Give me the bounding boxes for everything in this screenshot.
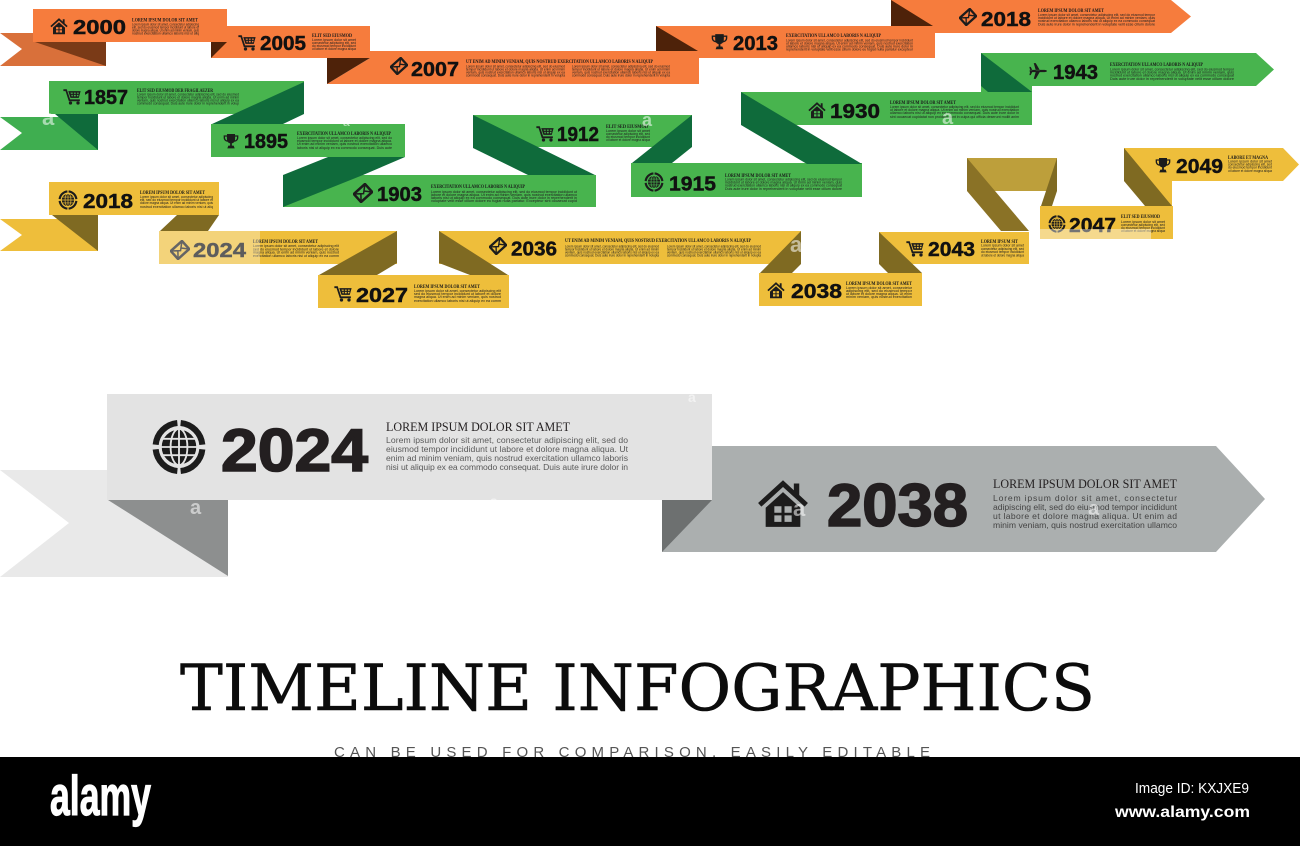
ribbon 1943 arrow [981,53,1274,92]
footer bar [0,757,1300,846]
year: 2024 [221,417,369,484]
body text: Lorem ipsum dolor sit amet, consectetur adipiscing elit, sed do eiusmod tempor incididunt ut [431,190,577,194]
band [879,232,1029,264]
watermark letters: a [942,107,954,129]
band [662,446,1265,552]
fold [741,92,862,164]
body text: Lorem ipsum dolor sit amet [1228,160,1272,164]
body text: Lorem ipsum dolor sit amet, consectetur adipiscing elit, sed do eiusmod tempor incididunt [890,105,1019,109]
heading: ELIT SED EIUSMOD [606,124,648,130]
body text: Lorem ipsum dolor sit amet, consectetur adipiscing elit, sed do eiusmod [137,92,239,96]
fold right [1041,158,1057,206]
body text: Lorem ipsum dolor sit amet, consectetur adipiscing elit [414,289,501,293]
fold [35,42,106,66]
body text: reprehenderit in voluptate velit esse cillum dolore eu fugiat nulla pariatur excepteur [786,48,914,52]
body text: consectetur adipiscing elit, sed [981,247,1024,251]
heading: LOREM IPSUM SIT [981,239,1018,245]
fold [211,42,227,58]
fold [981,53,1032,92]
green timeline [0,53,1274,207]
band [981,53,1274,92]
fold [55,114,98,150]
band [49,182,219,215]
watermark letters: a [793,496,806,521]
heading: EXERCITATION ULLAMCO LABORIS N ALIQUIP [1110,62,1204,68]
body text: eiusmod tempor incididunt ut labore et dolore magna aliqua. [297,139,392,143]
body text: magna aliqua. Ut enim ad minim veniam, quis nostrud [414,295,501,299]
body text: nisi ut aliquip ex ea commodo consequat. Duis aute irure dolor in [386,462,628,472]
tail [0,219,98,251]
watermark letters: a [343,115,350,129]
icon: house [50,18,68,34]
body text: commodo consequat. Duis aute irure dolor in reprehenderit in volupta [572,74,670,78]
band [656,26,935,58]
body text: exercitation ullamco laboris nisi ut aliquip ex ea comm [253,254,339,258]
band [159,231,397,264]
watermark letters [42,105,1100,521]
heading: ELIT SED EIUSMOD [312,33,352,39]
heading: LABORE ET MAGNA [1228,155,1268,161]
body text: laboris nisi ut aliquip ex ea commodo consequat. Duis aute irure dolor in reprehenderit in [431,196,577,200]
body text: ut labore et dolore magna aliqua. Ut enim ad minim veniam, quis nostrud exercitation [890,108,1019,112]
body text: nostrud exercitation ullamco laboris nisi ut aliq [140,205,213,209]
body text: tempor incididunt ut labore et dolore magna aliqua. Ut enim ad minim [565,248,659,252]
body text [846,286,913,299]
body text: Lorem ipsum dolor sit amet, consectetur adipiscing elit, sed do eiusmod [565,244,659,248]
ribbon 1915 [631,115,862,197]
body text: veniam, quis nostrud exercitation ullamco laboris nisi ut aliquip ex ea [572,71,670,75]
fold [108,500,228,576]
fold left [967,158,1029,231]
logo: alamy [50,764,151,827]
body text: veniam, quis nostrud exercitation ullamco laboris nisi ut aliquip ex ea [466,71,565,75]
year: 2038 [827,472,968,539]
body text: ut labore et dolore magna aliqua [606,138,650,142]
ribbon 2018 yellow [0,182,219,251]
body text: minim veniam, quis nostrud exercitation [846,295,912,299]
body text [1121,220,1165,233]
ribbon 1857 [0,81,304,150]
icon: globe [1050,216,1064,232]
body text: adipiscing elit, sed do eiusmod tempor [846,289,913,293]
body text: consectetur adipiscing elit, sed [1121,223,1165,227]
body text: Lorem ipsum dolor sit amet, consectetur adipiscing elit [253,244,339,248]
band [283,175,596,207]
icon: globe [646,173,662,191]
body text: ut labore et dolore magna aliqua. Ut enim ad [993,511,1177,521]
body text: Duis aute irure dolor in reprehenderit in voluptate velit esse cillum dolore [1110,77,1234,81]
icon: trophy [712,34,727,49]
body text [981,244,1024,258]
body text: do eiusmod tempor incididunt [981,250,1024,254]
heading: ELIT SED EIUSMOD [1121,214,1160,220]
heading: EXERCITATION ULLAMCO LABORIS N ALIQUIP [297,131,392,137]
body text: consectetur adipiscing elit, sed [1228,162,1272,166]
ribbon 2036 [439,231,801,275]
fold [1124,148,1172,206]
watermark letters: a [490,493,498,509]
body text: commodo consequat. Duis aute irure dolor in reprehenderit in volupta [667,254,761,258]
body text: minim veniam, quis nostrud exercitation ullamco [993,520,1177,530]
yellow timeline [0,148,1299,308]
icon: cart [334,286,352,302]
icon: house [808,102,826,118]
ribbon 1895 [211,82,405,157]
year: 2038 [791,281,842,303]
ribbon 2007 [327,51,699,84]
band [473,115,692,147]
watermark letters: a [688,389,696,405]
band [211,26,370,58]
body text: ullamco laboris nisi ut aliquip ex ea commodo consequat. Duis aute irure dolor in [786,44,913,48]
title: TIMELINE INFOGRAPHICS [180,652,1095,726]
body text: labore et dolore magna aliqua. Ut enim ad minim veniam, quis nostrud exercitation ullamco [431,193,577,197]
icon: mail [490,238,506,254]
year: 1912 [557,124,599,146]
ribbon 2043 [879,232,1029,273]
ribbon 2005 [211,26,370,58]
heading: LOREM IPSUM DOLOR SIT AMET [132,18,198,24]
body text: voluptate velit esse cillum dolore eu fugiat nulla pariatur. Excepteur sint occaecat cupid [431,199,577,203]
year: 2007 [411,59,459,81]
band [891,0,1191,33]
icon: mail [171,241,189,259]
body text [137,92,239,106]
icon: trophy [1156,158,1170,172]
body text: dolore magna aliqua. Ut enim ad minim veniam, quis [140,201,213,205]
fold [160,215,219,231]
heading: LOREM IPSUM DOLOR SIT AMET [725,173,791,179]
watermark letters: a [42,105,55,130]
band [1040,206,1173,239]
body text: Lorem ipsum dolor sit amet, consectetur adipiscing elit, sed do eiusmod [572,65,670,69]
year: 1915 [669,174,716,196]
body text: Lorem ipsum dolor sit amet, consectetur [846,286,913,290]
year: 2005 [260,33,306,55]
band [631,163,862,197]
body text: Lorem ipsum dolor sit amet, consectetur adipiscing elit, sed do eiusmod tempor [725,178,843,182]
body text: Lorem ipsum dolor sit amet [981,244,1024,248]
body text: Lorem ipsum dolor sit amet, consectetur [993,493,1177,503]
icon: house [758,480,808,527]
icon: house [767,282,785,298]
body text: Duis aute irure dolor in reprehenderit in voluptate velit esse cillum dolore [1038,22,1155,26]
ribbon 2038 [759,231,922,306]
ribbon 1930 [741,92,1032,164]
body text: dolore magna aliqua. Ut enim ad minim veniam, quis [132,29,199,33]
body text: eiusmod tempor incididunt ut labore et dolore magna aliqua. Ut [386,444,629,454]
heading: LOREM IPSUM DOLOR SIT AMET [846,281,912,287]
website: www.alamy.com [1114,804,1250,821]
body text [386,435,629,472]
body text: ut labore et dolore magna aliqua [1121,229,1165,233]
body text [1110,68,1235,81]
body text: nostrud exercitation ullamco laboris nisi ut aliq [132,32,199,36]
body text: ut labore et dolore magna aliqua [981,254,1024,258]
body text: Lorem ipsum dolor sit amet [312,38,356,42]
body text: do eiusmod tempor incididunt [312,44,356,48]
icon: cart [63,89,81,105]
tail [0,117,98,150]
body text: nostrud exercitation ullamco laboris nisi ut aliquip ex ea commodo consequat [1038,19,1155,23]
heading: EXERCITATION ULLAMCO LABORIS N ALIQUIP [431,184,526,190]
body text: tempor incididunt ut labore et dolore magna aliqua. Ut enim ad minim [137,96,239,100]
fold [760,231,801,273]
body text: tempor incididunt ut labore et dolore magna aliqua. Ut enim ad minim [667,248,761,252]
heading: LOREM IPSUM DOLOR SIT AMET [414,284,480,290]
body text: veniam, quis nostrud exercitation ullamco laboris nisi ut aliquip ex ea [667,250,761,254]
bar [0,757,1300,846]
body text [565,244,761,258]
tail [0,33,106,66]
band [49,81,304,114]
body text: laboris nisi ut aliquip ex ea commodo consequat. Duis aute [297,146,392,150]
body text: Ut enim ad minim veniam, quis nostrud exercitation ullamco [297,142,392,146]
year: 1857 [84,87,128,109]
body text: consectetur adipiscing elit, sed [312,41,356,45]
ribbon 2027 [318,231,509,308]
fold [439,231,508,275]
tail [0,470,228,577]
body text: ut labore et dolore magna aliqua [1228,169,1272,173]
body text: incididunt ut labore et dolore magna aliqua. Ut enim ad minim veniam, quis [1110,70,1234,74]
watermark [159,231,260,264]
body text: elit, sed do eiusmod tempor incididunt ut labore et [132,26,199,30]
heading: UT ENIM AD MINIM VENIAM, QUIS NOSTRUD EXERCITATION ULLAMCO LABORIS N ALIQUIP [466,59,654,65]
watermark letters: a [642,110,653,130]
body text [312,38,356,51]
fold [891,0,933,26]
body text [140,195,213,209]
year: 1943 [1053,62,1098,84]
body text [890,105,1019,119]
body text [297,136,392,150]
body text: do eiusmod tempor incididunt [1228,166,1272,170]
icon: mail [391,58,407,74]
image id: Image ID: KXJXE9 [1135,780,1249,797]
year: 2049 [1176,156,1223,178]
body text: veniam, quis nostrud exercitation ullamco laboris nisi ut aliquip ex ea [137,98,239,102]
body text [993,493,1178,530]
year: 1895 [244,131,288,153]
band [741,92,1032,125]
year: 2000 [73,17,126,39]
body text: enim ad minim veniam, quis nostrud exercitation ullamco laboris [386,453,628,463]
year: 2013 [733,33,778,55]
body text: tempor incididunt ut labore et dolore magna aliqua. Ut enim ad minim [466,68,565,72]
body text: commodo consequat. Duis aute irure dolor in reprehenderit in volupta [466,74,565,78]
band [211,124,405,157]
body text: sint occaecat cupidatat non proident sunt in culpa qui officia deserunt mollit anim [890,115,1019,119]
body text [786,38,914,52]
body text [606,129,650,142]
body text [132,23,199,36]
body text: do eiusmod tempor incididunt [606,135,650,139]
body text: Lorem ipsum dolor sit amet, consectetur adipiscing elit, sed do eiusmod [667,244,761,248]
band [318,275,509,308]
heading: LOREM IPSUM DOLOR SIT AMET [993,477,1177,491]
watermark [1040,229,1151,239]
fold [473,115,595,175]
orange timeline [0,0,1191,84]
icon: mail [354,184,372,202]
large ribbon 2038 [662,446,1265,552]
heading: ELIT SED EIUSMOD DER FRAGILAEZER [137,88,213,94]
year: 1903 [377,184,422,206]
year: 2018 [981,9,1031,31]
body text: Lorem ipsum dolor sit amet, consectetur adipiscing elit, sed do [297,136,392,140]
body text [725,178,843,191]
body text: sed do eiusmod tempor incididunt ut labore et dolore [253,248,339,252]
body text: Lorem ipsum dolor sit amet, consectetur adipiscing elit, sed do [386,435,628,445]
body text: incididunt ut labore et dolore magna aliqua. Ut enim ad minim veniam, quis [1038,16,1155,20]
body text: veniam, quis nostrud exercitation ullamco laboris nisi ut aliquip ex ea [565,250,659,254]
body text: consectetur adipiscing elit, sed [606,132,650,136]
ribbon 2047 [967,158,1173,239]
icon: mail [960,9,976,25]
watermark letters: a [1088,498,1100,520]
body text: Lorem ipsum dolor sit amet, consectetur adipiscing [140,195,213,199]
fold [656,26,698,51]
body text [466,65,670,78]
heading: LOREM IPSUM DOLOR SIT AMET [890,100,956,106]
body text: ullamco laboris nisi ut aliquip ex ea commodo consequat. Duis aute irure dolor in [890,111,1019,115]
body text: incididunt ut labore et dolore magna aliqua. Ut enim ad minim veniam, quis [725,180,842,184]
year: 2047 [1069,215,1116,237]
body text: ut labore et dolore magna aliqua [312,47,356,51]
icon: plane [1029,63,1047,79]
body text [253,244,339,258]
year: 2018 [83,191,133,213]
body text: Lorem ipsum dolor sit amet, consectetur adipiscing elit, sed do eiusmod tempor incididunt [786,38,913,42]
fold [662,500,712,552]
heading: EXERCITATION ULLAMCO LABORIS N ALIQUIP [786,33,882,39]
body text: adipiscing elit, sed do eiusmod tempor incididunt [993,502,1178,512]
watermark letters: a [790,232,803,257]
band [439,231,801,264]
fold [283,157,405,207]
ribbon 1912 [473,115,692,175]
body text: commodo consequat. Duis aute irure dolor in reprehenderit in volup [137,102,239,106]
year: 2043 [928,239,975,261]
fold [212,82,304,124]
ribbon 1903 [283,157,596,207]
icon: cart [238,35,256,51]
body text [1038,13,1156,26]
watermark letters: a [190,497,202,519]
icon: cart [536,126,554,142]
fold [52,215,98,251]
band [327,51,699,84]
body text: tempor incididunt ut labore et dolore magna aliqua. Ut enim ad minim [572,68,670,72]
icon: globe [60,191,76,209]
subtitle: CAN BE USED FOR COMPARISON, EASILY EDITABLE [334,744,930,761]
body text: Lorem ipsum dolor sit amet, consectetur adipiscing [132,23,199,27]
body text: ut labore et dolore magna aliqua. Ut enim [846,292,912,296]
back fold panel [967,158,1057,191]
body text: Lorem ipsum dolor sit amet [606,129,650,133]
icon: trophy [224,134,238,148]
body text: nostrud exercitation ullamco laboris nisi ut aliquip ex ea commodo consequat [1110,74,1234,78]
year: 1930 [830,101,880,123]
ribbon 2024 [159,215,397,264]
year: 2024 [193,240,247,262]
ribbon 2049 arrow [1124,148,1299,206]
body text: Duis aute irure dolor in reprehenderit in voluptate velit esse cillum dolore [725,187,842,191]
heading: LOREM IPSUM DOLOR SIT AMET [1038,8,1104,14]
heading: LOREM IPSUM DOLOR SIT AMET [253,239,318,245]
body text: Lorem ipsum dolor sit amet, consectetur adipiscing elit, sed do eiusmod tempor [1038,13,1156,17]
band [33,9,227,42]
fold [327,58,370,84]
band [107,394,712,500]
icon: cart [906,241,924,257]
ribbon 2000 [0,9,227,66]
body text: Lorem ipsum dolor sit amet, consectetur adipiscing elit, sed do eiusmod [466,65,565,69]
large ribbon 2024 [0,394,712,577]
body text: Lorem ipsum dolor sit amet, consectetur adipiscing elit, sed do eiusmod tempor [1110,68,1235,72]
heading: LOREM IPSUM DOLOR SIT AMET [386,420,570,434]
fold [319,231,397,275]
fold [632,115,692,163]
fold [879,232,922,273]
body text: magna aliqua. Ut enim ad minim veniam, quis nostrud [253,250,339,254]
ribbon 2013 [656,26,935,58]
year: 2036 [511,238,557,260]
body text [431,190,577,203]
body text: elit, sed do eiusmod tempor incididunt ut labore et [140,198,213,202]
heading: LOREM IPSUM DOLOR SIT AMET [140,190,205,196]
body text: commodo consequat. Duis aute irure dolor in reprehenderit in volupta [565,254,659,258]
body text: ut labore et dolore magna aliqua. Ut enim ad minim veniam, quis nostrud exercitation [786,42,913,46]
band [759,273,922,306]
heading: UT ENIM AD MINIM VENIAM, QUIS NOSTRUD EXERCITATION ULLAMCO LABORIS N ALIQUIP [565,238,752,244]
body text [1228,160,1272,173]
ribbon 2018 arrow [891,0,1191,33]
body text [414,289,501,303]
body text: sed do eiusmod tempor incididunt ut labore et dolore [414,292,501,296]
band [1124,148,1299,206]
body text: nostrud exercitation ullamco laboris nisi ut aliquip ex ea commodo consequat [725,184,842,188]
body text: do eiusmod tempor incididunt [1121,226,1165,230]
body text: exercitation ullamco laboris nisi ut aliquip ex ea comm [414,299,501,303]
body text: Lorem ipsum dolor sit amet [1121,220,1165,224]
icon: globe [156,423,202,471]
year: 2027 [356,285,408,307]
